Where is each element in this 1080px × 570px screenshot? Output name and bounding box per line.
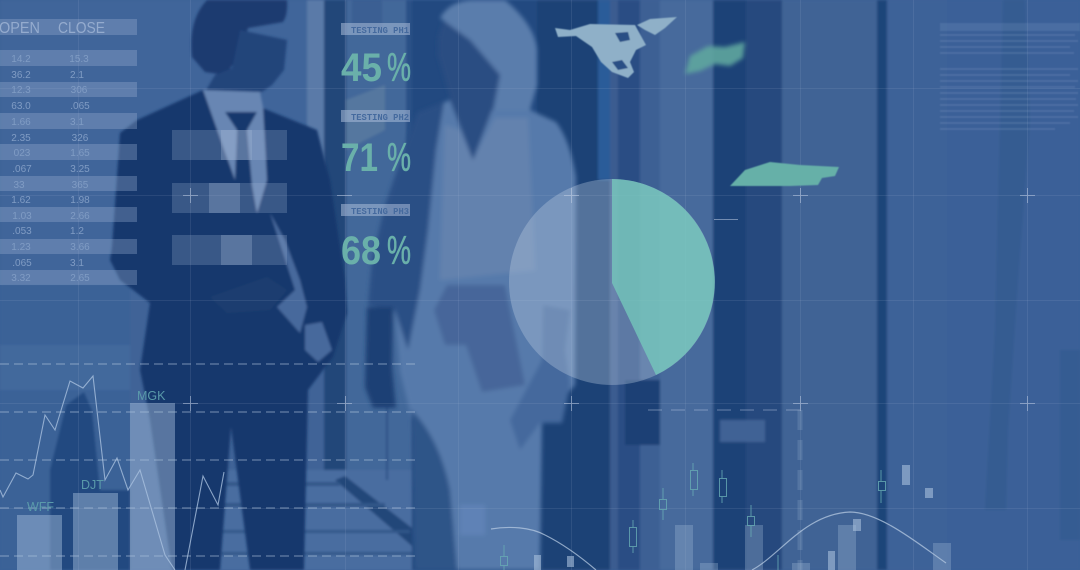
table values: 1.03 bbox=[12, 211, 32, 222]
dashed guide lines bbox=[0, 364, 800, 570]
table values: 2.66 bbox=[70, 211, 90, 222]
table values: 15.3 bbox=[69, 54, 89, 65]
bar: DJT bbox=[73, 478, 118, 570]
candlestick chart bbox=[500, 463, 951, 570]
data table bbox=[0, 19, 137, 285]
table values: 63.0 bbox=[11, 101, 31, 112]
crosshair markers bbox=[183, 188, 1035, 411]
table heading: OPEN bbox=[0, 20, 40, 37]
table values bbox=[11, 54, 90, 284]
data table: CLOSE bbox=[58, 20, 105, 37]
bar: MGK bbox=[130, 389, 175, 570]
line chart bbox=[0, 376, 175, 570]
testing phase 1 metric: % bbox=[387, 46, 411, 90]
testing phase 2 metric: TESTING PH2 bbox=[351, 112, 409, 123]
table values: 1.2 bbox=[70, 226, 84, 237]
table values: 023 bbox=[14, 148, 31, 159]
map: teal region top bbox=[685, 42, 745, 74]
table values: 3.32 bbox=[11, 273, 31, 284]
table values: 1.66 bbox=[11, 117, 31, 128]
table values: 1.62 bbox=[11, 195, 31, 206]
table values: 12.3 bbox=[11, 85, 31, 96]
pie teal sector bbox=[612, 179, 715, 375]
photo: man in dark suit bbox=[110, 0, 347, 570]
table values: .065 bbox=[70, 101, 90, 112]
icon: north america map bbox=[555, 17, 677, 78]
table values: 326 bbox=[72, 133, 89, 144]
table values: 1.98 bbox=[70, 195, 90, 206]
faint text block bbox=[940, 23, 1080, 130]
testing phase 3 metric: % bbox=[387, 229, 411, 273]
table values: 365 bbox=[72, 180, 89, 191]
bar: WFF: WFF bbox=[27, 500, 54, 514]
table values: 1.23 bbox=[11, 242, 31, 253]
table values: 3.25 bbox=[70, 164, 90, 175]
testing phase 1 metric bbox=[341, 23, 411, 90]
table values: 306 bbox=[71, 85, 88, 96]
table values: 33 bbox=[13, 180, 25, 191]
table values: 14.2 bbox=[11, 54, 31, 65]
table values: 2.1 bbox=[70, 70, 84, 81]
wave curve bbox=[491, 512, 946, 570]
table values: 2.35 bbox=[11, 133, 31, 144]
table values: 2.65 bbox=[70, 273, 90, 284]
table values: 3.66 bbox=[70, 242, 90, 253]
testing phase 1 metric: TESTING PH1 bbox=[351, 25, 409, 36]
table values: .065 bbox=[12, 258, 32, 269]
testing phase 3 metric bbox=[341, 204, 411, 273]
table values: .053 bbox=[12, 226, 32, 237]
market bar chart bbox=[17, 389, 175, 570]
table values: 3.1 bbox=[70, 258, 84, 269]
table stripes bbox=[0, 19, 137, 285]
status blocks bbox=[172, 130, 287, 265]
table values: 36.2 bbox=[11, 70, 31, 81]
map: teal region lower bbox=[730, 162, 839, 186]
testing phase 3 metric: 68 bbox=[341, 229, 381, 273]
testing phase 2 metric: % bbox=[387, 136, 411, 180]
testing phase 3 metric: TESTING PH3 bbox=[351, 206, 409, 217]
testing phase 2 metric bbox=[341, 110, 411, 180]
bar: WFF bbox=[17, 500, 62, 570]
table values: 3.1 bbox=[70, 117, 84, 128]
testing phase 1 metric: 45 bbox=[341, 46, 382, 90]
testing phase 2 metric: 71 bbox=[341, 136, 378, 180]
table values: 1.65 bbox=[70, 148, 90, 159]
line chart continuation bbox=[185, 472, 224, 570]
photo: woman in white bbox=[365, 0, 576, 570]
bar: DJT: DJT bbox=[81, 478, 104, 492]
pie chart bbox=[509, 179, 715, 385]
table values: .067 bbox=[12, 164, 32, 175]
bar: MGK: MGK bbox=[137, 389, 166, 403]
